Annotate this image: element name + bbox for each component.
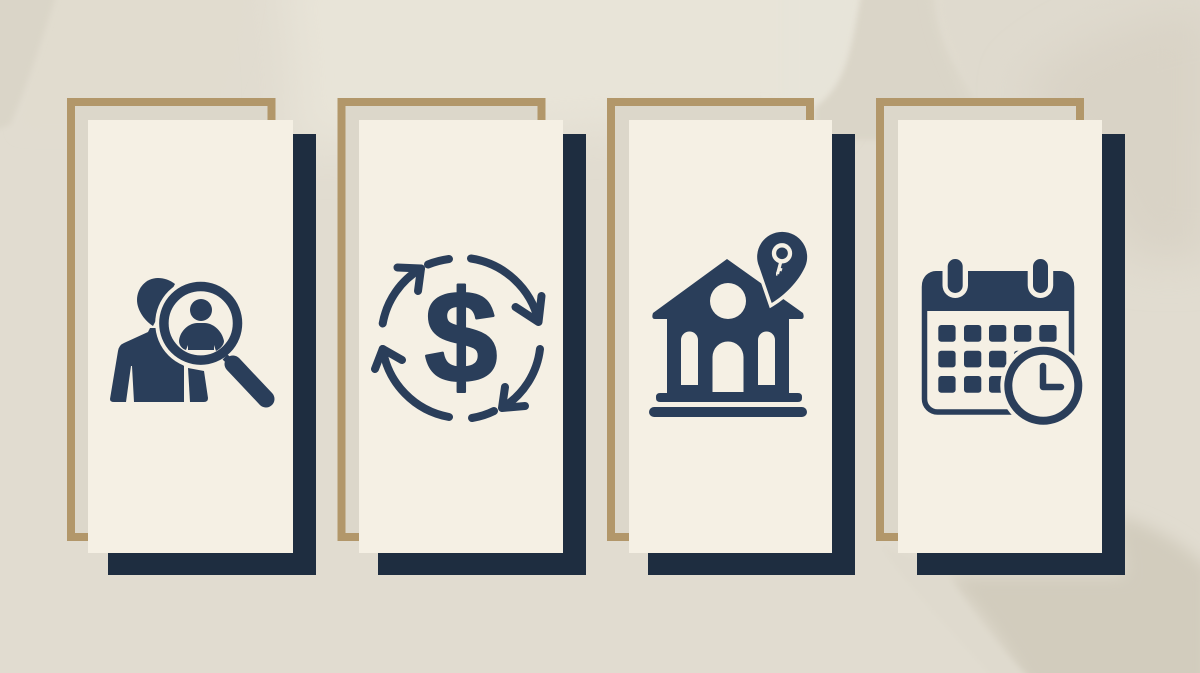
panel: property location (611, 102, 855, 575)
dollar sign: $ (425, 263, 497, 410)
gold frame (611, 102, 810, 537)
icon: map pin with key (757, 232, 807, 303)
cream card (359, 120, 563, 553)
icon: dollar in circular arrows (375, 258, 542, 418)
navy offset shadow (108, 134, 316, 575)
gold frame (342, 102, 542, 537)
icon: calendar with clock (922, 254, 1086, 429)
navy offset shadow (378, 134, 586, 575)
icon: clock (1000, 343, 1086, 429)
panel: recurring money (342, 102, 586, 575)
gold frame (880, 102, 1080, 537)
panel: schedule (880, 102, 1125, 575)
cream card (898, 120, 1102, 553)
cream card (88, 120, 293, 553)
icon: person under magnifying glass (110, 278, 266, 402)
navy offset shadow (917, 134, 1125, 575)
navy offset shadow (648, 134, 855, 575)
icon: house with key pin (649, 232, 807, 417)
panel: people search (71, 102, 316, 575)
gold frame (71, 102, 272, 537)
cream card (629, 120, 832, 553)
